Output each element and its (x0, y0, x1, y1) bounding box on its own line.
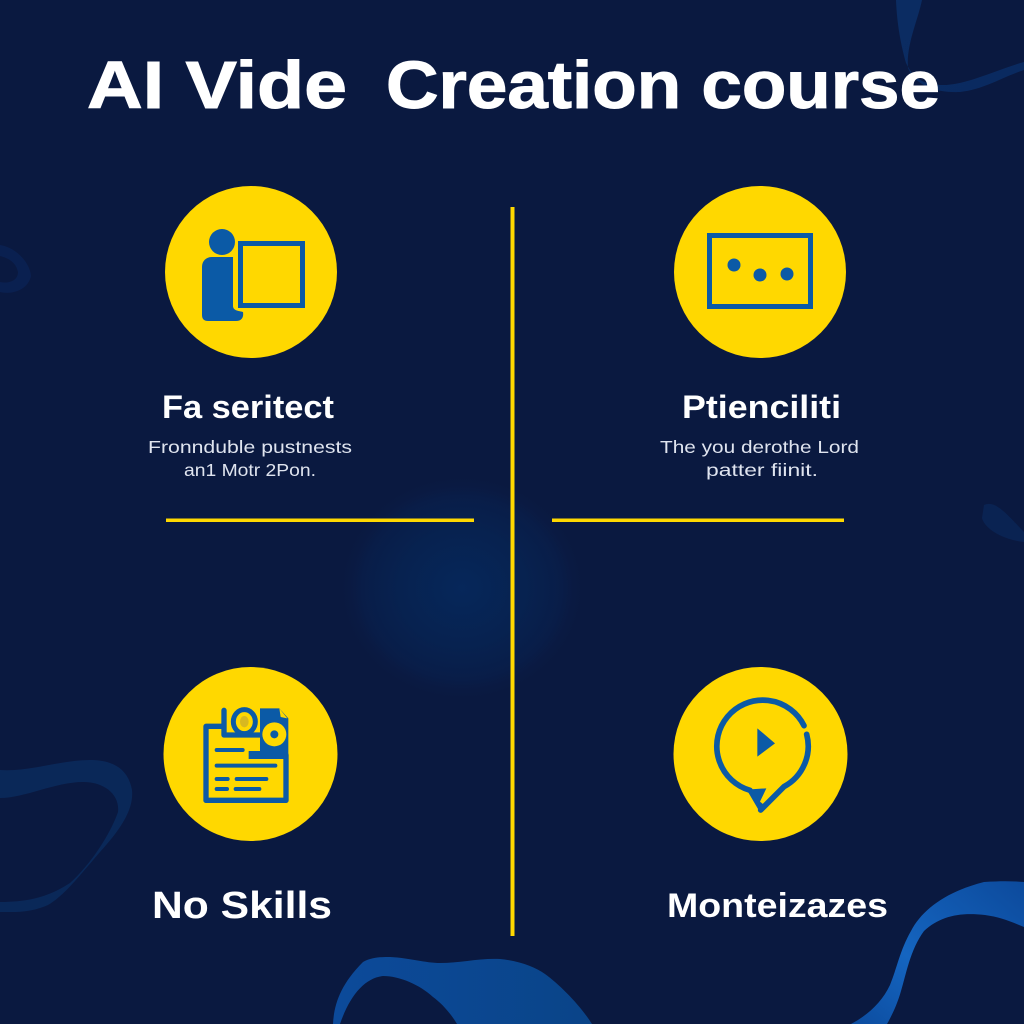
heading: No Skills (152, 885, 332, 927)
icon: document with film reels (164, 667, 338, 841)
description: The you derothe Lord (660, 437, 859, 457)
swoosh: left small (0, 245, 31, 293)
description (148, 437, 352, 480)
panel: top right (660, 186, 859, 480)
heading: Monteizazes (667, 887, 888, 925)
description (660, 437, 859, 480)
icon: screen with dots (674, 186, 846, 358)
icon: play speech bubble (674, 667, 848, 841)
horizontal divider: right (552, 518, 844, 522)
swoosh: right small (982, 504, 1024, 542)
horizontal divider: left (166, 518, 474, 522)
panel: bottom right (667, 667, 888, 925)
title: AI Vide (87, 48, 347, 123)
swoosh: bottom right (851, 881, 1024, 1024)
icon: presenter with screen (165, 186, 337, 358)
center glow (337, 473, 587, 703)
description: Fronndublе pustnests (148, 437, 352, 457)
description: an1 Motr 2Pon. (184, 460, 316, 480)
swoosh: left edge (0, 760, 132, 912)
description: patter fiinit. (706, 460, 818, 480)
heading: Ptienciliti (682, 389, 841, 425)
panel: bottom left (152, 667, 338, 927)
panel: top left (148, 186, 352, 480)
heading: Fa seritect (162, 389, 334, 425)
swoosh: top right (896, 0, 1024, 92)
swoosh: bottom centre (333, 957, 592, 1024)
vertical divider (510, 207, 514, 936)
title (87, 48, 940, 123)
title: Creation course (386, 48, 940, 123)
